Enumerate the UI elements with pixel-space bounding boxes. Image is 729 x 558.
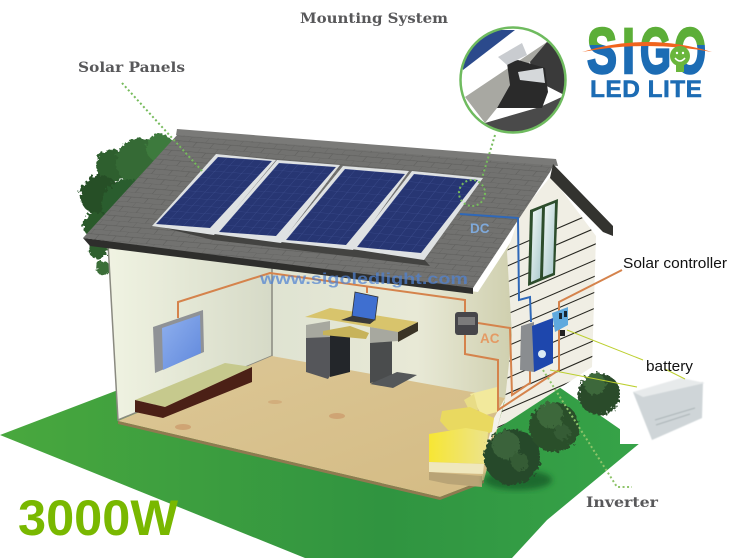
panel 2 (214, 160, 340, 243)
label: solar controller: Solar controller (623, 256, 727, 272)
battery backdrop (620, 376, 729, 444)
logo wordmark: O (674, 15, 706, 87)
battery leader lines (550, 330, 685, 387)
lawn (0, 360, 640, 558)
thermostat controller (455, 312, 478, 335)
DC wiring (460, 214, 531, 322)
label: inverter: Inverter (586, 495, 659, 511)
logo wordmark: S (587, 15, 617, 87)
television (153, 310, 204, 373)
back wall (272, 240, 514, 402)
panel 4 (352, 171, 483, 260)
mounting leader (459, 135, 495, 206)
solar controller box (552, 307, 568, 336)
label: solar panels: Solar Panels (78, 60, 185, 76)
house (108, 176, 600, 500)
DC label: DC (470, 221, 490, 236)
watermark url: www.sigoledlight.com (259, 271, 468, 288)
logo wordmark (587, 15, 706, 87)
upper chair (440, 387, 497, 436)
panel 3 (281, 166, 409, 250)
ridge (176, 129, 558, 166)
logo arc (582, 42, 712, 52)
desk (305, 308, 418, 388)
panel 1 (152, 154, 276, 235)
label: mounting system: Mounting System (300, 11, 448, 27)
AC wiring (178, 270, 622, 410)
sofa chairs (429, 387, 497, 487)
mounting detail inset (460, 27, 570, 135)
laptop (341, 292, 378, 324)
exterior siding wall (497, 176, 596, 429)
AC label: AC (480, 331, 500, 346)
solar panels leader (122, 83, 203, 172)
label: battery: battery (646, 358, 694, 375)
logo wordmark: G (640, 15, 671, 87)
left wall (108, 243, 272, 420)
wattage heading: 3000W (18, 489, 178, 546)
bushes (484, 373, 620, 490)
tree behind house (80, 134, 174, 275)
logo (582, 15, 712, 103)
lower chair (429, 428, 488, 487)
roof (83, 129, 613, 294)
window (528, 199, 558, 286)
roof underside shadow (83, 238, 473, 294)
floor (118, 356, 505, 500)
logo tagline: LED LITE (590, 76, 702, 103)
siding lines (496, 210, 600, 428)
shingles (83, 134, 555, 288)
logo wordmark: I (622, 15, 635, 87)
logo bulb (670, 46, 690, 72)
bench (135, 363, 252, 418)
battery (633, 378, 705, 440)
solar panels (152, 154, 483, 266)
inverter leader (543, 370, 632, 487)
corner wedge (487, 398, 505, 445)
gable fascia (550, 164, 613, 236)
inverter (520, 318, 553, 372)
